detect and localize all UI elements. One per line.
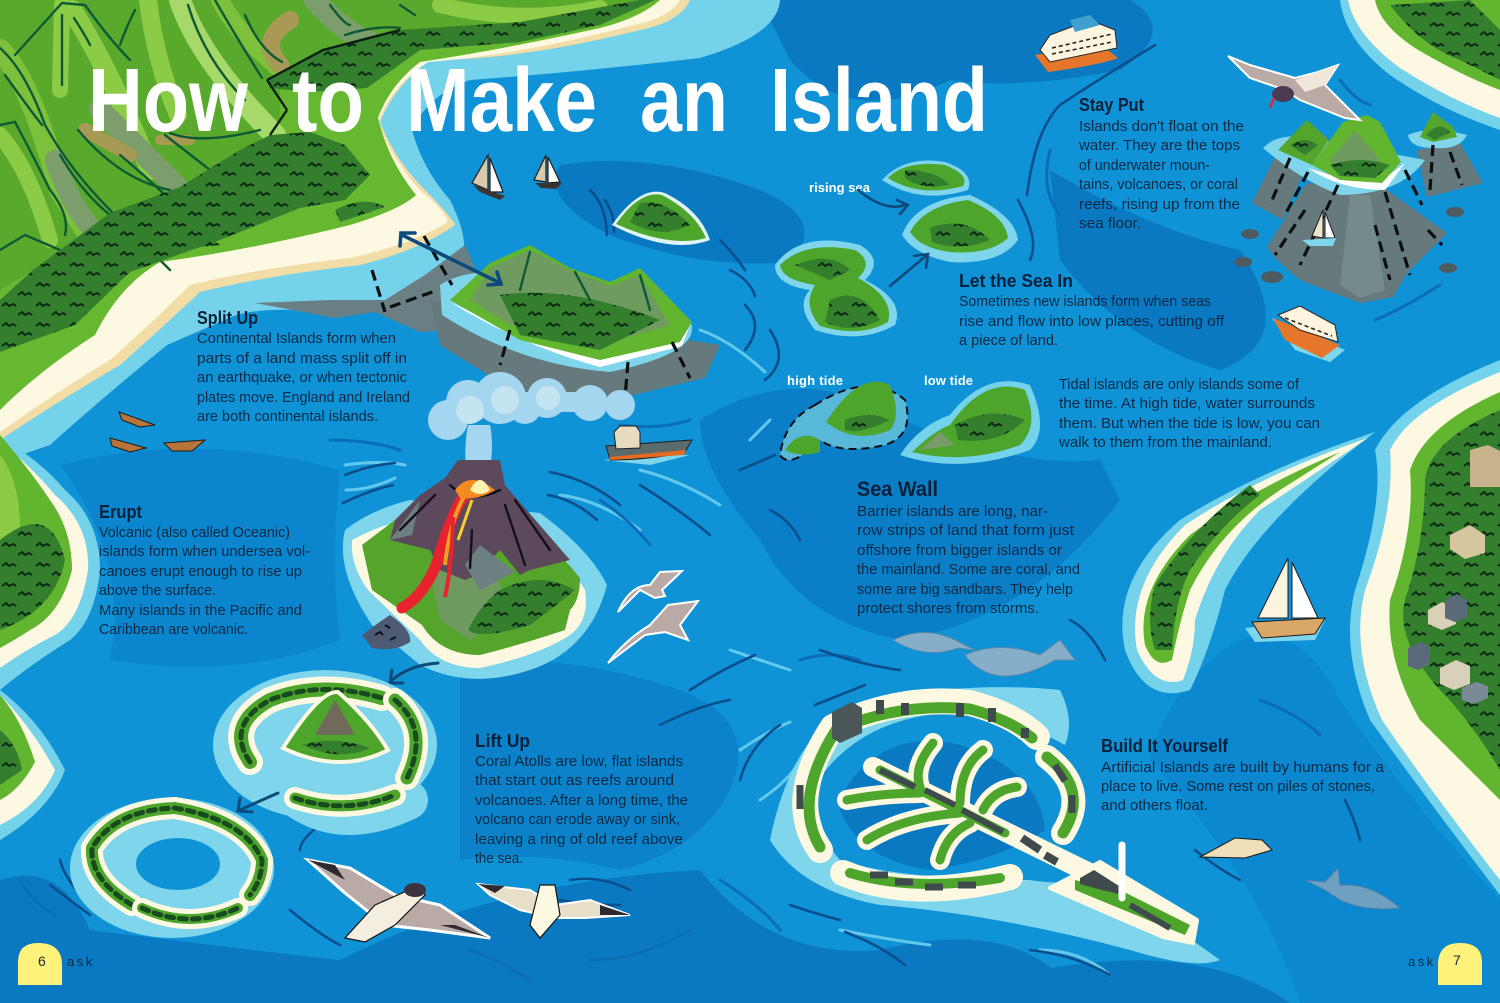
barrier island	[1122, 432, 1375, 693]
forest on mainland	[0, 0, 655, 352]
water marks	[345, 330, 1110, 975]
mainland green land and mountains	[0, 0, 660, 410]
tanker ship	[603, 426, 692, 465]
continental island grey rock and strip	[255, 236, 720, 398]
text block: Build It Yourself: place to live. Some rest on piles of stones,	[1101, 779, 1375, 795]
text block: Split Up: plates move. England and Ireland	[197, 390, 410, 406]
text block: tidal islands: walk to them from the mainland.	[1058, 435, 1272, 451]
text block: Sea Wall: some are big sandbars. They help	[857, 582, 1073, 598]
cruise ship, top	[1035, 15, 1118, 72]
page number: left: 6	[38, 953, 46, 969]
title: Island	[770, 51, 988, 151]
text block: Split Up: are both continental islands.	[197, 409, 378, 425]
text block: Split Up: Split Up	[197, 308, 258, 328]
title: an	[640, 51, 728, 151]
text block: Sea Wall: row strips of land that form just	[857, 523, 1074, 539]
text block: Stay Put	[1078, 95, 1244, 232]
whale	[1305, 868, 1400, 909]
yacht	[1245, 558, 1325, 642]
arrow: split distance	[400, 233, 501, 285]
arrow: rising sea curve	[858, 190, 908, 214]
title: Make	[406, 51, 597, 151]
text block: Let the Sea In: Let the Sea In	[959, 271, 1073, 291]
text block: Build It Yourself: and others float.	[1101, 798, 1208, 814]
text block: Build It Yourself: Artificial Islands are built by humans for a	[1101, 760, 1385, 776]
dolphins	[893, 632, 1075, 676]
text block: Split Up	[197, 308, 410, 425]
cruise ship, right	[1272, 306, 1345, 362]
bird: large gull bottom	[308, 860, 490, 942]
text block: Erupt: canoes erupt enough to rise up	[99, 564, 302, 580]
text block: Sea Wall: Sea Wall	[857, 478, 938, 501]
text block: Stay Put: water. They are the tops	[1078, 138, 1240, 154]
page number: left	[18, 943, 95, 985]
text block: Let the Sea In	[959, 271, 1225, 349]
bird: white gull bottom	[478, 884, 630, 938]
text block: Lift Up: Lift Up	[475, 731, 530, 751]
page number: right	[1408, 943, 1482, 985]
mainland beach	[0, 0, 690, 440]
text block: Erupt: Caribbean are volcanic.	[99, 622, 248, 638]
text block: Split Up: an earthquake, or when tectonic	[197, 370, 407, 386]
text block: Lift Up: that start out as reefs around	[475, 773, 674, 789]
text block: Lift Up	[475, 731, 688, 867]
text block: Let the Sea In: rise and flow into low places, cutting off	[959, 314, 1225, 330]
text block: Stay Put: tains, volcanoes, or coral	[1079, 177, 1238, 193]
text block: Let the Sea In: Sometimes new islands form when seas	[959, 294, 1211, 310]
text block: tidal islands: Tidal islands are only islands some of	[1059, 377, 1300, 393]
Stay Put mountains	[1252, 112, 1483, 303]
title: How	[88, 51, 249, 151]
text block: Erupt	[99, 502, 310, 638]
text block: Sea Wall: protect shores from storms.	[857, 601, 1039, 617]
text block: Stay Put: reefs, rising up from the	[1079, 197, 1240, 213]
text block: Lift Up: the sea.	[475, 851, 523, 867]
arrow: atoll to atoll	[238, 793, 278, 812]
arrow: flooding link	[890, 254, 928, 286]
text block: Let the Sea In: a piece of land.	[959, 333, 1058, 349]
text block: Sea Wall: Barrier islands are long, nar-	[857, 504, 1048, 520]
sailboats	[472, 155, 1336, 246]
text block: Sea Wall	[857, 478, 1080, 617]
label: rising sea: rising sea	[809, 180, 871, 195]
text block: Build It Yourself: Build It Yourself	[1101, 736, 1229, 756]
tidal islands	[780, 381, 1040, 464]
top right land	[1340, 0, 1500, 130]
text block: Erupt: Volcanic (also called Oceanic)	[99, 525, 290, 541]
title: to	[292, 51, 364, 151]
text block: Stay Put: sea floor.	[1079, 216, 1141, 232]
left land, Erupt side	[0, 435, 100, 840]
title	[88, 51, 988, 151]
bird: top right gull	[1228, 56, 1360, 120]
page number: left: ask	[67, 954, 95, 969]
text block: tidal islands: the time. At high tide, water surrounds	[1059, 396, 1315, 412]
text block: Stay Put: Stay Put	[1079, 95, 1144, 115]
text block: Stay Put: of underwater moun-	[1079, 158, 1210, 174]
label: high tide: high tide	[787, 373, 843, 388]
right land with buildings	[1350, 360, 1500, 895]
text block: Lift Up: volcano can erode away or sink,	[475, 812, 680, 828]
volcano island	[343, 460, 607, 679]
label: low tide: low tide	[924, 373, 973, 388]
coral atoll ring	[70, 798, 274, 938]
atoll with volcano	[213, 670, 437, 820]
rising sea islands	[775, 160, 1018, 336]
arrow: volcano to atoll	[390, 663, 438, 683]
text block: Erupt: above the surface.	[99, 583, 216, 599]
volcano smoke	[428, 372, 635, 468]
text block: Lift Up: Coral Atolls are low, flat islands	[475, 754, 683, 770]
page number: right: 7	[1453, 952, 1461, 968]
text block: Split Up: parts of a land mass split off in	[197, 351, 407, 367]
mainland shallows, top left	[0, 0, 780, 462]
text block: Erupt: Many islands in the Pacific and	[99, 603, 302, 619]
stones	[1234, 207, 1464, 283]
text block: Erupt: islands form when undersea vol-	[99, 544, 310, 560]
text block: Erupt: Erupt	[99, 502, 142, 522]
text block: Sea Wall: the mainland. Some are coral, and	[857, 562, 1080, 578]
text block: Lift Up: volcanoes. After a long time, the	[475, 793, 688, 809]
canoes	[110, 412, 205, 452]
text block: tidal islands: them. But when the tide is low, you can	[1059, 416, 1320, 432]
text block: tidal islands	[1058, 377, 1320, 451]
small island, top centre	[612, 192, 710, 245]
page number: right: ask	[1408, 954, 1436, 969]
text block: Sea Wall: offshore from bigger islands or	[857, 543, 1062, 559]
text block: Build It Yourself	[1101, 736, 1385, 814]
text block: Stay Put: Islands don't float on the	[1079, 119, 1244, 135]
text block: Lift Up: leaving a ring of old reef above	[475, 832, 683, 848]
motor boat	[1200, 838, 1272, 858]
birds: pair of gulls	[608, 571, 698, 663]
text block: Split Up: Continental Islands form when	[197, 331, 396, 347]
palm artificial island	[770, 687, 1220, 963]
